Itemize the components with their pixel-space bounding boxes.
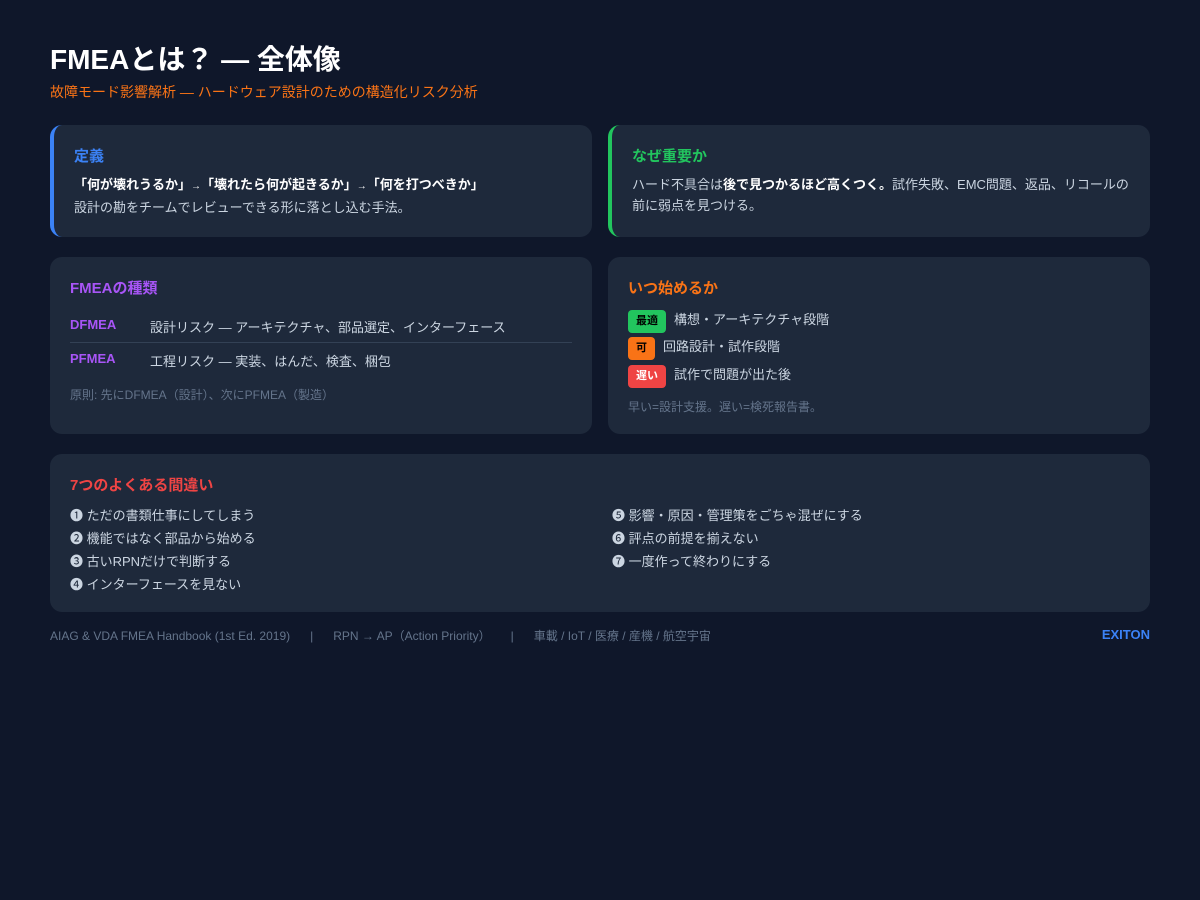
heading: definition: 定義: [74, 148, 104, 165]
row: best: [628, 310, 829, 333]
row: late: 遅い: [636, 370, 658, 382]
title: FMEAとは？ — 全体像: [50, 44, 341, 75]
text: definition: 設計の勘をチームでレビューできる形に落とし込む手法。: [74, 200, 411, 215]
list: right: ❺ 影響・原因・管理策をごちゃ混ぜにする: [612, 508, 863, 523]
note: when: 早い=設計支援。遅い=検死報告書。: [628, 400, 822, 414]
heading: mistakes: 7つのよくある間違い: [70, 477, 213, 494]
subtitle: 故障モード影響解析 — ハードウェア設計のための構造化リスク分析: [50, 84, 478, 100]
brand: EXITON: [1102, 627, 1150, 642]
row: DFMEA: 設計リスク — アーキテクチャ、部品選定、インターフェース: [150, 320, 506, 335]
row: best: 最適: [636, 315, 658, 327]
panel: mistakes: [50, 454, 1150, 612]
row: PFMEA: 工程リスク — 実装、はんだ、検査、梱包: [150, 354, 391, 369]
list: left: ❹ インターフェースを見ない: [70, 577, 241, 592]
text: definition: [74, 177, 484, 215]
row: ok: 回路設計・試作段階: [663, 339, 780, 354]
footer: AIAG & VDA FMEA Handbook (1st Ed. 2019) | RPN → AP（Action Priority） | 車載 / IoT / 医療 / 産機 / 航空宇宙: [50, 629, 711, 643]
text: why: ハード不具合は後で見つかるほど高くつく。試作失敗、EMC問題、返品、リコールの前に弱点を見つける。: [632, 177, 1129, 213]
row: PFMEA: PFMEA: [70, 351, 116, 366]
row: PFMEA: [70, 351, 391, 369]
panel: definition: [50, 125, 592, 237]
row: ok: [628, 337, 780, 360]
list: right: ❼ 一度作って終わりにする: [612, 554, 771, 569]
note: principle: 原則: 先にDFMEA（設計）、次にPFMEA（製造）: [70, 388, 334, 402]
list: left: ❸ 古いRPNだけで判断する: [70, 554, 231, 569]
panel: when to start: [608, 257, 1150, 434]
list: left: [70, 508, 256, 592]
list: left: ❶ ただの書類仕事にしてしまう: [70, 508, 255, 523]
panel: why important: [608, 125, 1150, 237]
row: best: 構想・アーキテクチャ段階: [674, 312, 829, 327]
row: DFMEA: [70, 311, 572, 343]
list: left: ❷ 機能ではなく部品から始める: [70, 531, 256, 546]
text: definition: 「何が壊れうるか」→「壊れたら何が起きるか」→「何を打つべきか」: [74, 177, 484, 192]
list: right: ❻ 評点の前提を揃えない: [612, 531, 759, 546]
row: late: 試作で問題が出た後: [674, 367, 791, 382]
row: DFMEA: DFMEA: [70, 317, 116, 332]
row: late: [628, 365, 791, 388]
heading: why: なぜ重要か: [632, 148, 707, 165]
footer: [50, 627, 1150, 643]
heading: when: いつ始めるか: [628, 280, 718, 297]
panel: types: [50, 257, 592, 434]
list: right: [612, 508, 863, 569]
row: ok: 可: [636, 342, 647, 354]
heading: types: FMEAの種類: [70, 280, 158, 297]
